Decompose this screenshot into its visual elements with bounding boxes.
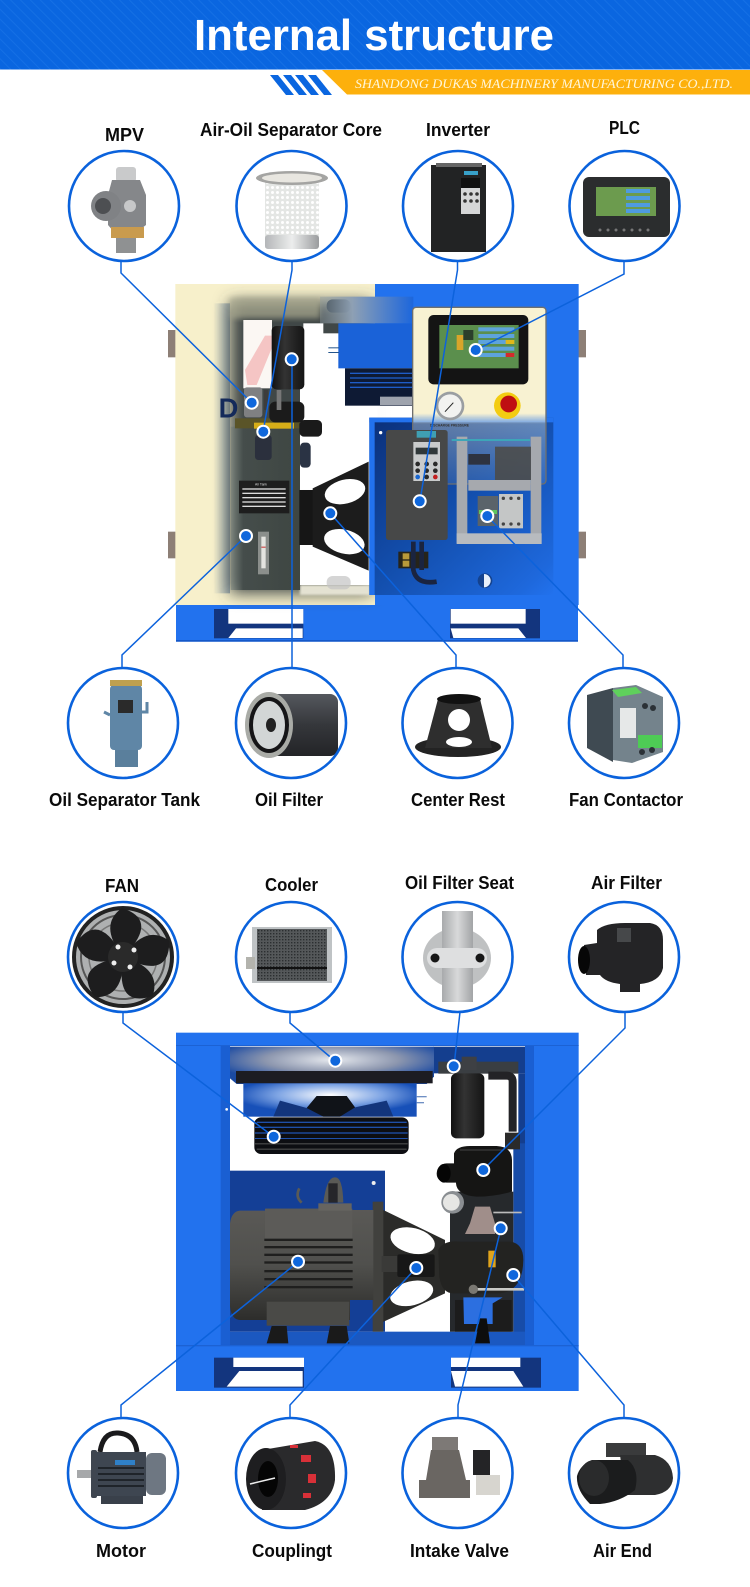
air end xyxy=(438,1192,524,1343)
air filter housing xyxy=(437,1146,512,1197)
callout: Inverter xyxy=(402,120,514,262)
callout: Air End xyxy=(568,1418,680,1561)
nameplate xyxy=(239,481,289,513)
intake valve xyxy=(465,1207,522,1234)
brand mark: D xyxy=(219,392,238,423)
cream door xyxy=(175,284,377,605)
icon: cooler core xyxy=(246,927,332,983)
fan shroud xyxy=(328,323,413,368)
callout: Oil Filter: Oil Filter xyxy=(255,790,323,810)
cabinet logo xyxy=(478,573,492,588)
icon: center rest xyxy=(415,694,501,757)
icon: tank xyxy=(104,680,147,767)
icon: air filter xyxy=(578,923,663,992)
callout: Center Rest: Center Rest xyxy=(411,790,505,810)
gauge caption: DISCHARGE PRESSURE xyxy=(430,424,469,428)
machine 2: rear view xyxy=(176,1033,579,1391)
callout: Air Filter: Air Filter xyxy=(591,873,662,893)
company name ribbon: SHANDONG DUKAS MACHINERY MANUFACTURING CO.,LTD. xyxy=(355,76,733,91)
icon: intake valve xyxy=(419,1437,500,1498)
right door xyxy=(375,284,579,605)
callout: Couplingt: Couplingt xyxy=(252,1541,332,1561)
electrical bracket xyxy=(452,437,542,544)
callout: MPV xyxy=(68,125,180,262)
callout: Air End: Air End xyxy=(593,1541,652,1561)
icon: motor xyxy=(77,1433,166,1504)
center rest xyxy=(299,462,369,571)
callout: PLC: PLC xyxy=(609,118,640,138)
callout: Fan Contactor: Fan Contactor xyxy=(569,790,683,810)
callout: Oil Separator Tank: Oil Separator Tank xyxy=(49,790,201,810)
callout: Fan Contactor xyxy=(568,668,683,810)
inverter cables xyxy=(398,542,437,582)
minimum pressure valve xyxy=(244,387,268,417)
icon: contactor xyxy=(587,685,663,763)
callout: Cooler xyxy=(236,875,346,1012)
callout: Oil Separator Tank xyxy=(49,668,201,810)
inverter xyxy=(386,430,448,540)
oil level gauge xyxy=(258,532,269,574)
callout: Oil Filter xyxy=(236,668,346,810)
gauge xyxy=(441,1191,464,1214)
right navy backing xyxy=(433,1047,525,1333)
callout: FAN: FAN xyxy=(105,876,139,896)
callout: Cooler: Cooler xyxy=(265,875,318,895)
oil filter seat and pipes xyxy=(438,1057,520,1149)
fan ribs xyxy=(254,1117,409,1154)
pallet base xyxy=(176,603,578,642)
icon: filter seat xyxy=(423,911,491,1002)
pressure gauge xyxy=(436,392,464,420)
center rest xyxy=(373,1202,445,1332)
icon: valve xyxy=(91,167,146,253)
motor backing plate xyxy=(230,1171,385,1332)
motor xyxy=(230,1177,373,1343)
callout: Couplingt xyxy=(236,1418,346,1561)
icon: separator core xyxy=(256,171,328,249)
cooler xyxy=(230,1047,434,1084)
control panel door xyxy=(413,307,546,484)
callout: Motor xyxy=(68,1418,178,1561)
callout: PLC xyxy=(569,118,680,262)
callout: MPV: MPV xyxy=(105,125,144,145)
frame xyxy=(176,1033,579,1391)
oil separator tank xyxy=(231,418,300,590)
company name ribbon xyxy=(270,70,750,95)
callout: Air-Oil Separator Core: Air-Oil Separator Core xyxy=(200,120,382,140)
fan shroud xyxy=(243,1083,427,1117)
fan contactor xyxy=(478,494,523,528)
callout dots xyxy=(240,344,519,1281)
callout: Oil Filter Seat: Oil Filter Seat xyxy=(405,873,514,893)
inner cabinet plate xyxy=(369,418,553,595)
fan ribs xyxy=(345,368,415,406)
nameplate: Air Tank xyxy=(255,483,267,487)
emergency stop xyxy=(494,392,521,419)
touch screen xyxy=(428,315,528,384)
pallet windows xyxy=(214,1358,541,1388)
callout: Inverter: Inverter xyxy=(426,120,490,140)
dark interior glow xyxy=(213,298,372,595)
white rear wall xyxy=(243,320,415,585)
icon: axial fan xyxy=(72,908,175,1007)
icon: oil filter xyxy=(245,692,338,758)
callout: Intake Valve xyxy=(402,1418,513,1561)
icon: air end xyxy=(577,1443,673,1504)
callout: Center Rest xyxy=(402,668,513,810)
callout: Oil Filter Seat xyxy=(402,873,514,1012)
leader lines xyxy=(121,262,625,1418)
header banner xyxy=(0,0,750,70)
oil filter body xyxy=(269,326,322,468)
side hinges xyxy=(168,330,586,558)
machine 1: front view with control cabinet xyxy=(168,284,586,642)
icon: coupling xyxy=(246,1441,335,1510)
callout: Motor: Motor xyxy=(96,1541,146,1561)
coupling xyxy=(397,1254,435,1277)
callout: Air Filter xyxy=(568,873,680,1012)
callout: Intake Valve: Intake Valve xyxy=(410,1541,509,1561)
callout: FAN xyxy=(68,876,178,1012)
icon: touch controller xyxy=(583,177,670,237)
callout: Air-Oil Separator Core xyxy=(200,120,382,262)
rear bolts xyxy=(327,299,351,589)
icon: inverter unit xyxy=(431,163,486,252)
title: Internal structure xyxy=(194,11,554,60)
